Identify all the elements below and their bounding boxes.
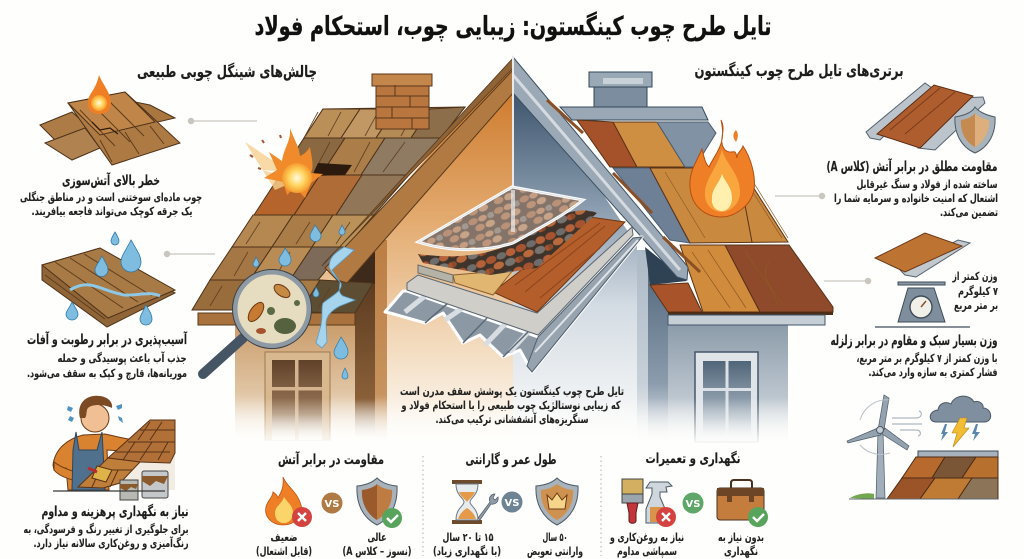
- comparison: fire resistance: [256, 451, 412, 558]
- body: class A: [834, 177, 998, 219]
- body: fire: [20, 190, 202, 218]
- cutaway: layered Kingston tile: [385, 187, 642, 372]
- label: no maintenance: [718, 531, 764, 558]
- icon: wet rotten planks: [42, 248, 175, 327]
- flame on tile: [690, 120, 754, 217]
- panel: costly maintenance: [24, 396, 188, 550]
- label: needs coating: [609, 531, 684, 558]
- heading: moisture: آسیب‌پذیری در برابر رطوبت و آفات: [27, 331, 187, 348]
- VS badge: [682, 492, 704, 514]
- icon: plank on scale: [875, 233, 970, 327]
- center description paragraph: سنگریزه‌های آتشفشانی ترکیب می‌کند.: [436, 412, 588, 426]
- center description paragraph: که زیبایی نوستالژیک چوب طبیعی را با استحکام فولاد و: [401, 399, 621, 412]
- icon: hourglass and wrench: [452, 480, 498, 524]
- VS badge: VS: [686, 499, 700, 510]
- label: weak: [256, 531, 312, 558]
- label: excellent: (نسوز – کلاس A): [342, 545, 412, 558]
- heading: maintenance: نیاز به نگهداری پرهزینه و مداوم: [42, 503, 188, 520]
- body: moisture: جذب آب باعث پوسیدگی و حمله: [58, 351, 186, 365]
- rake board: [325, 70, 513, 283]
- label: 50 years: وارانتی تعویض: [527, 545, 583, 558]
- roof: worn wood shingles: [192, 107, 465, 313]
- label: excellent: عالی: [368, 531, 386, 544]
- illustration: modern steel tile house (right half): [513, 57, 833, 445]
- layer: granular insulation: [407, 227, 633, 335]
- panel: advantage class A fire resistance: [826, 83, 998, 219]
- body: lightweight: [856, 351, 998, 379]
- rake flashing: [513, 57, 688, 280]
- label: excellent: [342, 531, 412, 558]
- dotted column dividers: [423, 456, 601, 556]
- window: modern house: [695, 352, 758, 442]
- layer: corrugated steel: [385, 237, 642, 372]
- roof section: [887, 451, 998, 499]
- flame burst on roof: [245, 128, 323, 198]
- heading: نگهداری و تعمیرات: [646, 450, 740, 467]
- label: 15 to 20 years: [433, 531, 501, 558]
- icon: flame with X: [266, 477, 312, 527]
- heading: طول عمر و گارانتی: [466, 451, 556, 468]
- heading: fire: خطر بالای آتش‌سوزی: [62, 172, 160, 189]
- panel: moisture and pest vulnerability: [27, 232, 187, 381]
- heading: challenges of natural wood shingles: چالش‌های شینگل چوبی طبیعی: [137, 62, 317, 82]
- body: maintenance: [24, 522, 188, 550]
- icon: toolbox with check: [717, 480, 768, 527]
- heading: مقاومت در برابر آتش: [278, 451, 384, 468]
- roof: wood-look steel tiles: [577, 120, 833, 312]
- layer: pebbles: [418, 210, 597, 275]
- wind lines: [892, 411, 922, 436]
- VS badge: VS: [325, 499, 339, 510]
- center description paragraph: تایل طرح چوب کینگستون یک پوشش سقف مدرن است: [400, 384, 624, 398]
- storm cloud: [930, 396, 991, 422]
- chimney: metal: [589, 72, 652, 109]
- weight note: بر متر مربع: [954, 299, 998, 312]
- illustration: wind turbine, storm and roof: [847, 395, 998, 499]
- body: moisture: [27, 351, 187, 381]
- label: needs coating: سمپاشی مداوم: [617, 545, 677, 558]
- VS badge: [502, 492, 522, 512]
- fascia: [198, 313, 355, 325]
- lightning bolts: [941, 418, 980, 447]
- ridge flashing: [560, 107, 708, 120]
- body: moisture: موریانه‌ها، قارچ و کپک به سقف می‌شود.: [27, 367, 187, 381]
- label: 15 to 20 years: ۱۵ تا ۲۰ سال: [442, 531, 494, 544]
- weight note: وزن کمتر از: [952, 270, 998, 283]
- label: 50 years: [527, 531, 583, 558]
- weight note: ۷ کیلوگرم: [958, 284, 998, 298]
- transparent film over pebbles: [418, 187, 583, 250]
- body: fire: چوب ماده‌ای سوختنی است و در مناطق جنگلی: [20, 190, 202, 204]
- icon: wood shield with check: [357, 478, 402, 528]
- comparison: maintenance and repairs: [609, 450, 768, 558]
- icon: brush and spray bottle with X: [622, 479, 676, 527]
- chimney: brick: [372, 74, 432, 129]
- label: needs coating: نیاز به روغن‌کاری و: [609, 531, 684, 544]
- body: class A: تضمین می‌کند.: [940, 206, 998, 219]
- icon: crown shield: [536, 478, 578, 525]
- layer: wood plank: [493, 217, 625, 312]
- center description paragraph: [400, 384, 624, 426]
- label: weak: (قابل اشتعال): [256, 545, 312, 558]
- body: maintenance: برای جلوگیری از تغییر رنگ و فرسودگی، به: [24, 522, 188, 536]
- VS badge: VS: [505, 498, 519, 509]
- gutter: [668, 312, 833, 325]
- title: تایل طرح چوب کینگستون: زیبایی چوب، استحکام فولاد: [254, 11, 772, 42]
- comparison: lifespan and warranty: [433, 451, 583, 558]
- label: weak: ضعیف: [270, 531, 298, 544]
- body: maintenance: رنگ‌آمیزی و روغن‌کاری سالانه نیاز دارد.: [34, 536, 188, 550]
- window: old house: [265, 352, 330, 440]
- icon: wood steel panel with shield: [866, 83, 995, 153]
- connector lines: [164, 118, 871, 284]
- label: 50 years: ۵۰ سال: [542, 531, 568, 544]
- illustration: old wooden house (left half): [192, 58, 513, 445]
- water drops on roof: [253, 225, 348, 379]
- turbine: [847, 395, 909, 499]
- label: no maintenance: بدون نیاز به: [718, 531, 764, 544]
- body: fire: یک جرقه کوچک می‌تواند فاجعه بیافریند.: [32, 205, 192, 218]
- panel: lightweight and earthquake resistant: [830, 233, 998, 379]
- label: 15 to 20 years: (با نگهداری زیاد): [433, 544, 501, 558]
- body: lightweight: با وزن کمتر از ۷ کیلوگرم بر متر مربع،: [856, 351, 998, 365]
- VS badge: [322, 492, 342, 514]
- water leak rivulet: [316, 247, 355, 348]
- heading: advantages of Kingston tile: برتری‌های تایل طرح چوب کینگستون: [694, 61, 904, 81]
- weight note: [952, 270, 998, 312]
- magnifying glass with termites and mold: [203, 270, 312, 374]
- burn hole in shingles: [312, 163, 352, 176]
- panel: high fire risk: [20, 75, 202, 218]
- icon: burning wood shingles: [40, 92, 180, 165]
- label: no maintenance: نگهداری: [724, 544, 758, 558]
- icon: worried man painting shingles: [53, 396, 175, 500]
- vertical split line: [512, 56, 514, 186]
